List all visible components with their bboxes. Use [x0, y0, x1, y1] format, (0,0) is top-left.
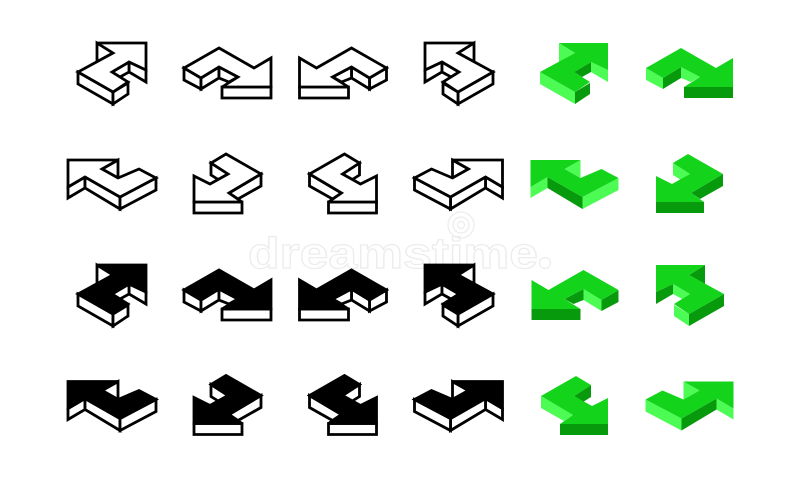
arrow row 2 column 3 outline	[310, 154, 376, 213]
arrow row 4 column 5 green	[541, 376, 608, 435]
arrow row 1 column 3 outline	[300, 48, 386, 98]
arrow row 1 column 2 outline	[184, 48, 271, 98]
arrow row 3 column 4 black	[425, 265, 493, 326]
arrow row 3 column 2 black	[184, 270, 271, 320]
arrow row 1 column 4 outline	[425, 43, 493, 104]
arrow row 4 column 3 black	[310, 376, 376, 434]
arrow row 4 column 1 black	[68, 382, 156, 430]
arrow row 2 column 5 green	[530, 160, 618, 209]
arrow row 4 column 6 green	[646, 382, 734, 430]
arrow row 3 column 3 black	[300, 270, 386, 320]
arrow row 1 column 5 green	[540, 43, 608, 104]
watermark	[248, 212, 550, 278]
arrow row 4 column 4 black	[414, 382, 502, 430]
arrow row 4 column 2 black	[194, 376, 261, 434]
arrow row 2 column 1 outline	[68, 160, 156, 209]
arrow row 3 column 1 black	[78, 265, 146, 326]
arrow row 3 column 5 green	[532, 270, 618, 320]
arrow row 1 column 6 green	[646, 48, 733, 98]
arrow row 2 column 2 outline	[194, 154, 261, 213]
arrow row 2 column 6 green	[656, 154, 723, 213]
arrow row 3 column 6 green	[656, 265, 724, 326]
watermark: dreamstime	[248, 229, 538, 278]
arrow row 2 column 4 outline	[414, 160, 502, 209]
arrow row 1 column 1 outline	[78, 43, 146, 104]
